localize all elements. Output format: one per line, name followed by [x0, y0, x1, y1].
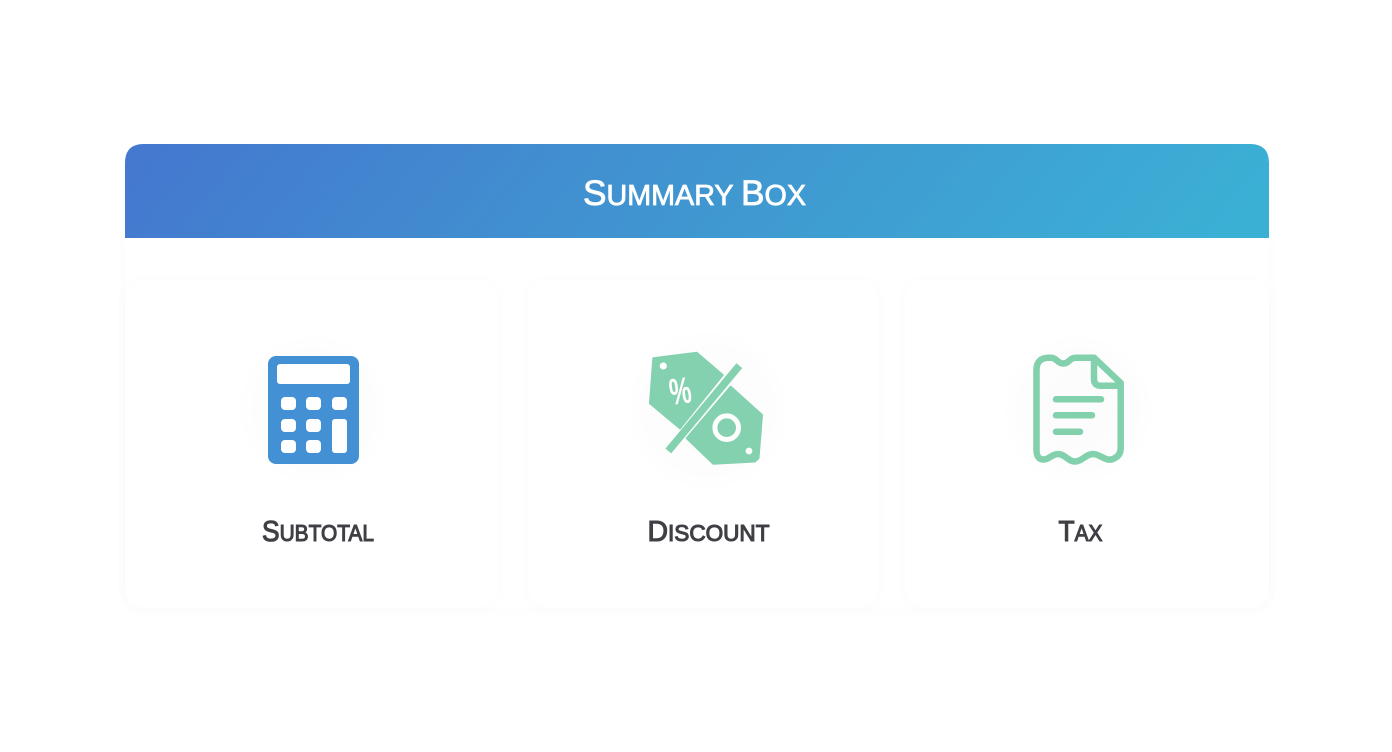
icon: calculator: [268, 356, 359, 464]
icon: discount tag: %: [667, 369, 694, 413]
icon: tax receipt: [1036, 358, 1121, 462]
card: tax: [905, 280, 1269, 607]
label: subtotal: SUBTOTAL: [262, 516, 374, 548]
header banner: [125, 144, 1269, 238]
panel background: [125, 238, 1269, 608]
card: subtotal: [125, 280, 498, 607]
icon: discount tag: [650, 353, 762, 464]
label: tax: TAX: [1058, 516, 1102, 548]
label: discount: DISCOUNT: [648, 516, 770, 548]
card: discount: [528, 280, 878, 607]
panel: summary box: [125, 144, 1269, 608]
heading: summary box: SUMMARY BOX: [583, 174, 806, 213]
